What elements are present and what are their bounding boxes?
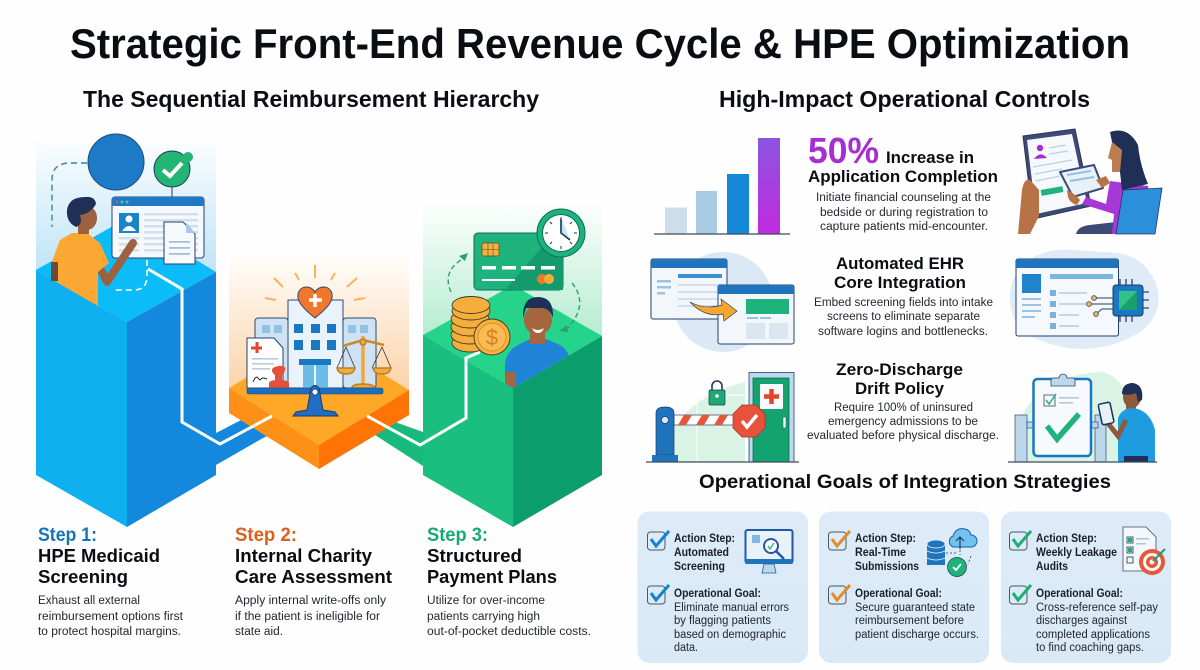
white route line	[148, 269, 272, 444]
text: EHR integration: screens to eliminate separate	[827, 311, 980, 323]
goal text	[674, 588, 789, 654]
arrow heads	[459, 253, 568, 332]
arrow: orange transfer	[690, 299, 737, 321]
checkbox 2	[648, 585, 669, 604]
person pointing	[51, 197, 133, 306]
goal text: data.	[674, 642, 698, 654]
text: zero discharge	[807, 360, 999, 442]
action text: Real-Time	[855, 547, 906, 559]
stat: 50 percent: capture patients mid-encounter.	[820, 221, 988, 233]
gate posts	[1015, 415, 1106, 462]
step 2 text: Care Assessment	[235, 566, 392, 587]
panel: reimbursement staircase	[36, 132, 602, 527]
hospital building	[255, 300, 376, 388]
large tablet	[1023, 129, 1091, 219]
action text: Weekly Leakage	[1036, 547, 1117, 559]
action text: Submissions	[855, 561, 919, 573]
step 1 text: HPE Medicaid	[38, 545, 160, 566]
step 1 text: reimbursement options first	[38, 611, 184, 623]
illustration: payment plans	[448, 209, 585, 388]
dashed arrows	[448, 257, 580, 330]
step 3 text	[427, 525, 591, 638]
icon: cloud database	[927, 529, 977, 576]
step 1 text: Screening	[38, 566, 128, 587]
smiling person	[505, 297, 569, 388]
goal text	[855, 588, 979, 641]
window	[1016, 259, 1118, 336]
step 3 text: Structured	[427, 545, 522, 566]
screening window	[112, 197, 204, 264]
step 3 text: out-of-pocket deductible costs.	[427, 626, 591, 638]
step 1 text: Step 1:	[38, 525, 97, 546]
action text	[674, 533, 735, 573]
icon: checklist target	[1123, 527, 1165, 575]
panel: card 3	[1001, 512, 1171, 663]
illustration: screening	[51, 134, 204, 306]
action text: Action Step:	[674, 533, 735, 545]
fulcrum	[293, 386, 338, 416]
window 2	[718, 285, 794, 344]
title: Strategic Front-End Revenue Cycle & HPE Optimization	[70, 20, 1130, 67]
step 2 text: if the patient is ineligible for	[235, 611, 380, 623]
step 2 text: Apply internal write-offs only	[235, 595, 386, 607]
woman	[1076, 131, 1150, 234]
goal text: reimbursement before	[855, 615, 964, 627]
hand right	[1067, 190, 1080, 205]
step 2 text: state aid.	[235, 626, 283, 638]
illustration: discharge gate	[646, 372, 799, 462]
barrier post	[652, 407, 678, 462]
panel: card 1	[638, 512, 808, 663]
checkbox 2	[1010, 585, 1031, 604]
document with stamp	[247, 338, 289, 388]
icon: green check	[154, 151, 193, 198]
heading: operational goals: Operational Goals of Integration Strategies	[699, 471, 1111, 493]
barrier arm	[674, 415, 736, 425]
text: EHR integration: Automated EHR	[836, 254, 964, 273]
text: EHR integration: Core Integration	[834, 273, 966, 292]
stat: 50 percent: bedside or during registration to	[820, 207, 988, 219]
text: zero discharge: Zero-Discharge	[836, 360, 963, 379]
checkbox 1	[1010, 531, 1031, 550]
goal text: by flagging patients	[674, 615, 771, 627]
illustration: woman with tablet	[1018, 129, 1162, 234]
goal text: Cross-reference self-pay	[1036, 602, 1158, 614]
heading: sequential hierarchy: The Sequential Reimbursement Hierarchy	[83, 86, 539, 112]
illustration: EHR chip	[1010, 249, 1159, 349]
step 2 text	[235, 525, 392, 638]
step 3 block	[423, 200, 602, 527]
clipboard	[1034, 374, 1091, 456]
person with phone	[1098, 383, 1155, 462]
text: zero discharge: evaluated before physical discharge.	[807, 430, 999, 442]
icon: large blue circle	[88, 134, 144, 190]
icon: dollar coin: $	[486, 325, 498, 350]
panel: card 2	[819, 512, 989, 663]
stat: 50 percent: Initiate financial counseling at the	[816, 192, 991, 204]
step 1 text: Exhaust all external	[38, 595, 140, 607]
balance beam	[247, 388, 383, 394]
checkbox 2	[828, 585, 850, 604]
goal text: Operational Goal:	[674, 588, 761, 600]
stat: 50 percent: 50%	[808, 130, 879, 171]
step 1 block	[36, 132, 216, 527]
action text: Automated	[674, 547, 729, 559]
action text: Action Step:	[1036, 533, 1097, 545]
action text	[1036, 533, 1117, 573]
stat: 50 percent: Application Completion	[808, 167, 998, 186]
stat: 50 percent	[808, 130, 998, 233]
illustration: EHR windows	[651, 252, 794, 352]
action text: Screening	[674, 561, 725, 573]
step 2 platform	[229, 250, 409, 469]
goal text: Operational Goal:	[1036, 588, 1123, 600]
dashed path	[52, 163, 87, 227]
credit card	[474, 233, 563, 290]
goal text: to find coaching gaps.	[1036, 642, 1144, 654]
text: zero discharge: Drift Policy	[855, 379, 945, 398]
icon: monitor magnifier	[746, 530, 792, 573]
step 2 text: Internal Charity	[235, 545, 373, 566]
chair	[1116, 188, 1162, 234]
action text: Audits	[1036, 561, 1068, 573]
bar chart	[654, 138, 790, 234]
goal text: based on demographic	[674, 629, 786, 641]
text: EHR integration: Embed screening fields into intake	[814, 297, 993, 309]
connector: green band	[375, 422, 423, 466]
goal text: completed applications	[1036, 629, 1150, 641]
white route line 2	[367, 352, 480, 445]
text: EHR integration	[814, 254, 993, 338]
door	[749, 372, 794, 462]
text: zero discharge: emergency admissions to be	[828, 416, 978, 428]
goal text: patient discharge occurs.	[855, 629, 979, 641]
chip	[1087, 279, 1149, 322]
connector: blue band	[216, 418, 280, 465]
illustration: clipboard audit	[1008, 372, 1157, 462]
scales	[337, 336, 391, 388]
text: EHR integration: software logins and bottlenecks.	[818, 326, 988, 338]
rays	[265, 265, 365, 300]
stat: 50 percent: Increase in	[886, 148, 974, 167]
hand	[1018, 180, 1039, 234]
goal text: Eliminate manual errors	[674, 602, 789, 614]
goal text: discharges against	[1036, 615, 1128, 627]
icon: lock	[709, 381, 725, 405]
icon: heart	[298, 287, 332, 318]
window 1	[651, 259, 727, 319]
step 3 text: patients carrying high	[427, 611, 540, 623]
coins	[451, 296, 510, 355]
step 1 text: to protect hospital margins.	[38, 626, 181, 638]
dashed return path	[113, 260, 147, 290]
illustration: charity care hospital	[247, 265, 391, 416]
heading: operational controls: High-Impact Operational Controls	[719, 86, 1090, 112]
icon: stop check	[733, 405, 765, 437]
step 3 text: Step 3:	[427, 525, 488, 546]
step 3 text: Utilize for over-income	[427, 595, 545, 607]
goal text: Operational Goal:	[855, 588, 942, 600]
checkbox 1	[828, 531, 850, 550]
action text: Action Step:	[855, 533, 916, 545]
action text	[855, 533, 919, 573]
goal text	[1036, 588, 1158, 654]
clock	[537, 209, 585, 257]
finger	[1096, 176, 1110, 188]
checkbox 1	[648, 531, 669, 550]
step 2 text: Step 2:	[235, 525, 297, 546]
small tablet	[1060, 165, 1103, 197]
step 1 text	[38, 525, 184, 638]
text: zero discharge: Require 100% of uninsured	[834, 402, 973, 414]
goal text: Secure guaranteed state	[855, 602, 975, 614]
step 3 text: Payment Plans	[427, 566, 557, 587]
